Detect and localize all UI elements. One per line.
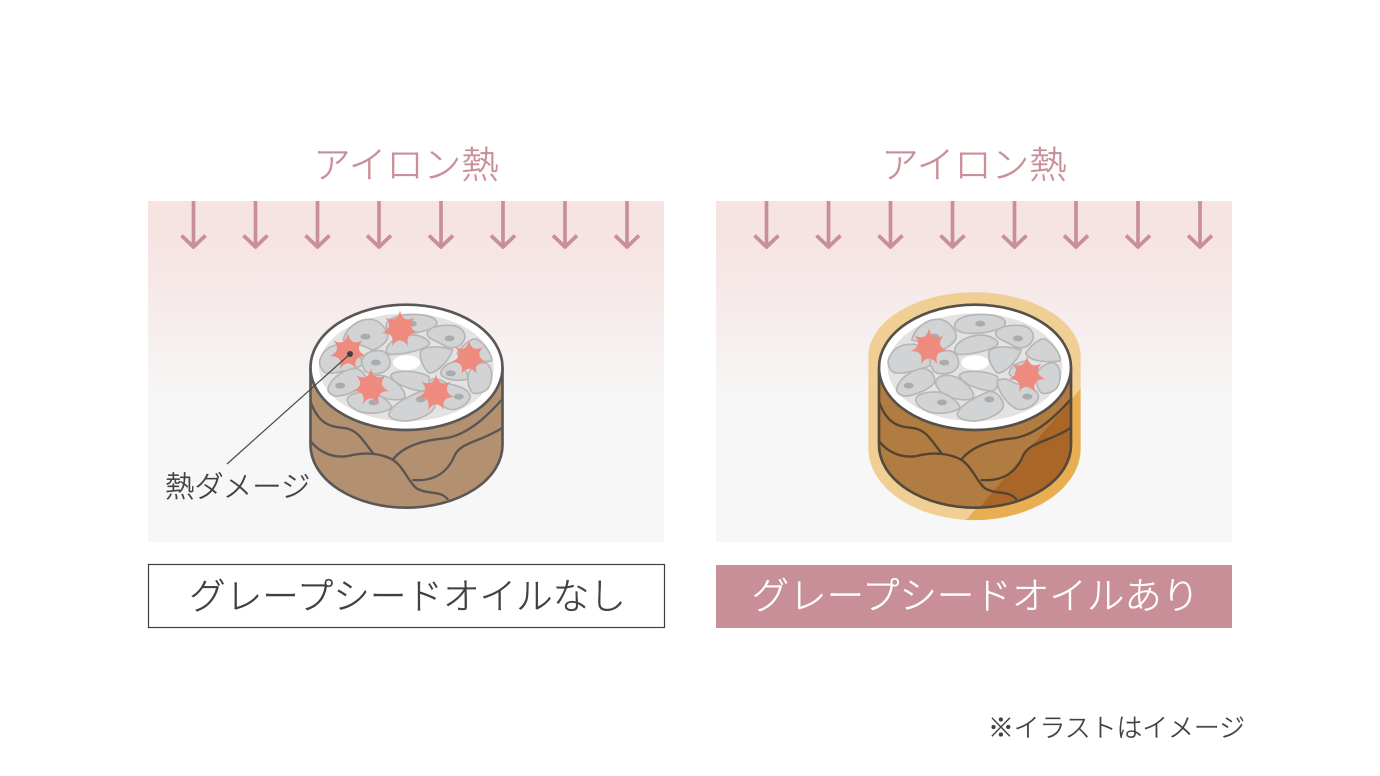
label: heat damage: 熱ダメージ	[165, 471, 310, 504]
hair cross-section left	[310, 305, 502, 508]
caption box: with oil: グレープシードオイルあり	[752, 575, 1199, 617]
heat arrows right	[754, 201, 1212, 247]
heat damage stars right	[911, 328, 1045, 392]
heat background right	[716, 201, 1232, 542]
note: illustration is an image: ※イラストはイメージ	[988, 713, 1245, 743]
panel: without grapeseed oil	[148, 144, 664, 628]
hair cross-section with oil coating	[868, 292, 1087, 523]
leader line	[227, 351, 353, 464]
panel: with grapeseed oil	[716, 144, 1232, 628]
caption box: without oil: グレープシードオイルなし	[189, 576, 626, 617]
heat damage stars left	[330, 310, 486, 410]
heading: iron heat left: アイロン熱	[313, 144, 499, 186]
heading: iron heat right: アイロン熱	[881, 144, 1067, 186]
heat arrows left	[182, 201, 639, 247]
caption box: without oil	[148, 564, 664, 628]
heat background left	[148, 201, 664, 542]
caption box: with oil	[716, 565, 1232, 628]
